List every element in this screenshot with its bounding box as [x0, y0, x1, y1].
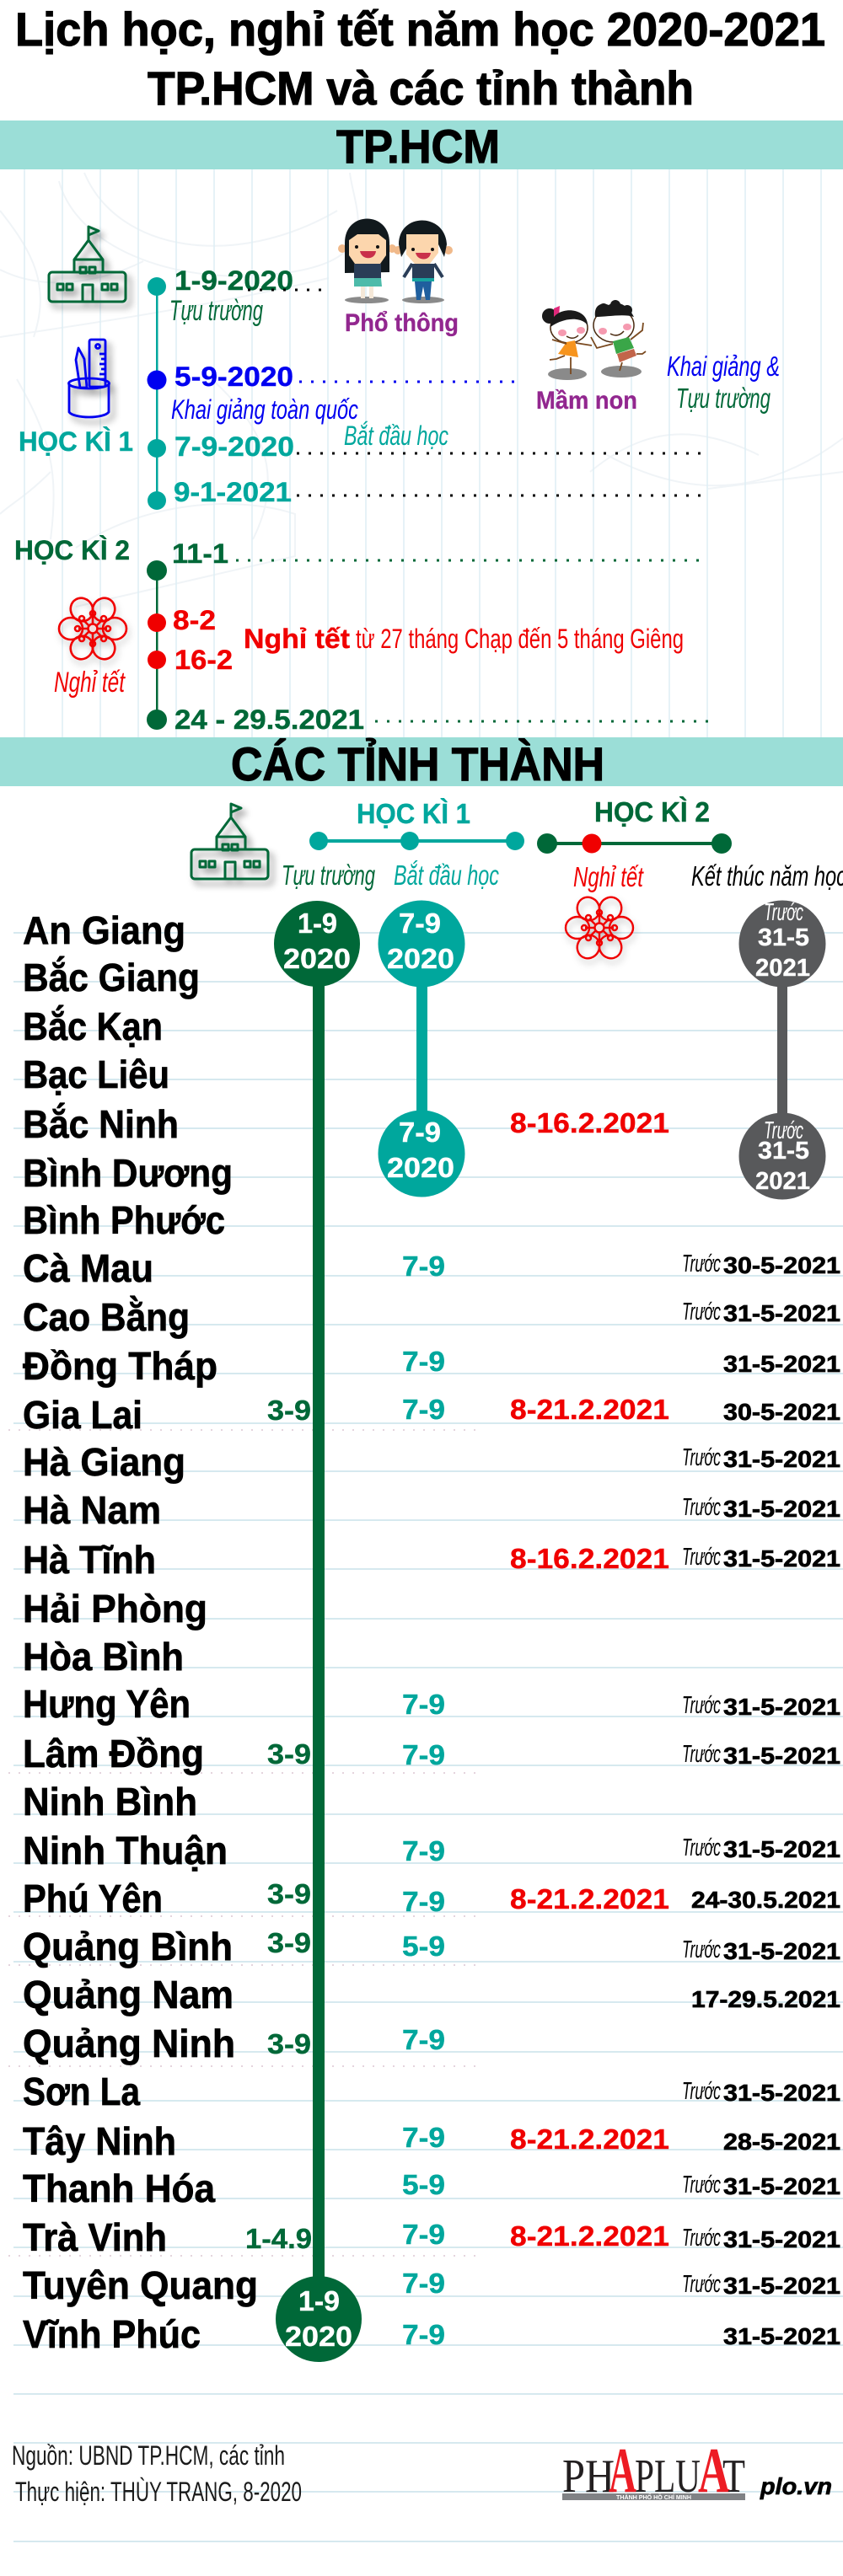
row: Cà Mau: Cà Mau — [23, 1246, 153, 1290]
row: Hưng Yên — [23, 1682, 840, 1726]
row: Lâm Đồng — [23, 1732, 840, 1775]
date: 7-9-2020 — [175, 420, 708, 462]
row: Gia Lai: 7-9 — [402, 1394, 445, 1425]
panel: các tỉnh thành heading band: CÁC TỈNH THÀNH — [231, 737, 604, 790]
row: Lâm Đồng: Lâm Đồng — [23, 1732, 204, 1775]
row: Đồng Tháp: Đồng Tháp — [23, 1344, 217, 1388]
row: Lâm Đồng: 3-9 — [267, 1738, 311, 1770]
row: Phú Yên: 24-30.5.2021 — [691, 1887, 840, 1913]
panel: TP.HCM timeline — [0, 169, 843, 737]
bracket: tựu trường 1-9-2020: 2020 — [283, 943, 351, 974]
row: Tuyên Quang: 31-5-2021 — [723, 2273, 840, 2299]
row: Hà Giang — [23, 1440, 840, 1484]
bracket: bắt đầu học 7-9-2020: 2020 — [387, 1152, 454, 1183]
bracket: bắt đầu học 7-9-2020 — [378, 900, 465, 1197]
logo: Pháp Luật: PH — [562, 2450, 615, 2503]
row: Hà Tĩnh — [23, 1538, 840, 1582]
row: Quảng Ninh: 7-9 — [402, 2024, 445, 2055]
row: Tuyên Quang — [23, 2263, 840, 2307]
panel: TP.HCM heading band — [0, 120, 843, 173]
row: Hưng Yên: 31-5-2021 — [723, 1694, 840, 1720]
row: Bắc Giang: Bắc Giang — [23, 956, 200, 999]
row: Gia Lai: 8-21.2.2021 — [510, 1394, 669, 1425]
row: Trà Vinh: Trà Vinh — [23, 2215, 167, 2259]
row: Hưng Yên: Trước — [682, 1692, 721, 1719]
icon: pencil cup — [69, 340, 110, 417]
timeline: semester 2 axis — [147, 560, 167, 730]
date: 1-9-2020 — [169, 265, 330, 327]
row: Thanh Hóa: Trước — [682, 2172, 721, 2198]
timeline: semester 1 axis — [147, 277, 167, 510]
bracket: tựu trường 1-9-2020: 1-9 — [298, 908, 337, 939]
row: Đồng Tháp — [23, 1344, 840, 1388]
footer: source and credit: Nguồn: UBND TP.HCM, các tỉnh — [12, 2440, 285, 2471]
row: Bình Dương: Bình Dương — [23, 1151, 233, 1195]
row: Hà Tĩnh: 31-5-2021 — [723, 1545, 840, 1572]
column label: tựu trường: Tựu trường — [282, 860, 375, 891]
row: Vĩnh Phúc: 31-5-2021 — [723, 2323, 840, 2349]
date: 1-9-2020: 1-9-2020 — [175, 265, 293, 296]
bracket: kết thúc trước 31-5-2021: 31-5 — [758, 1138, 809, 1165]
row: Cao Bằng: Cao Bằng — [23, 1295, 190, 1339]
bracket: tựu trường 1-9-2020 — [274, 901, 362, 2362]
bracket: bắt đầu học 7-9-2020: 2020 — [387, 943, 454, 974]
panel: các tỉnh thành heading band — [0, 737, 843, 790]
row: Cao Bằng — [23, 1295, 840, 1339]
row: Tuyên Quang: 7-9 — [402, 2268, 445, 2299]
row: Quảng Ninh: 3-9 — [267, 2028, 311, 2059]
row: Tây Ninh: Tây Ninh — [23, 2119, 176, 2163]
icon: preschool children — [542, 300, 646, 380]
row: Hà Tĩnh: Hà Tĩnh — [23, 1538, 156, 1582]
row: Gia Lai: Gia Lai — [23, 1393, 142, 1437]
legend: học kì 2: HỌC KÌ 2 — [594, 796, 710, 827]
label: khai giảng và tựu trường: Khai giảng & — [667, 351, 780, 382]
row: Ninh Thuận: Trước — [682, 1834, 721, 1861]
title: TP.HCM và các tỉnh thành — [148, 62, 694, 115]
row: Ninh Thuận: 31-5-2021 — [723, 1836, 840, 1862]
row: Cà Mau: 7-9 — [402, 1251, 445, 1282]
row: Hòa Bình: Hòa Bình — [23, 1635, 184, 1679]
row: Tây Ninh: 7-9 — [402, 2122, 445, 2153]
bracket: kết thúc trước 31-5-2021: Trước — [764, 899, 803, 926]
row: Cà Mau — [23, 1246, 840, 1290]
row: Quảng Ninh — [23, 2022, 445, 2065]
row: Hải Phòng: Hải Phòng — [23, 1587, 207, 1631]
icon: secondary students — [338, 219, 453, 303]
row: Tây Ninh: 28-5-2021 — [723, 2129, 840, 2155]
logo: Pháp Luật: PLU — [635, 2450, 701, 2503]
date: 16-2: 16-2 — [175, 645, 233, 675]
row: Hà Giang: 31-5-2021 — [723, 1446, 840, 1472]
row: Hà Tĩnh: 8-16.2.2021 — [510, 1543, 669, 1574]
column label: bắt đầu học: Bắt đầu học — [394, 860, 499, 891]
label: học kì 1: HỌC KÌ 1 — [19, 426, 133, 457]
icon: peach blossom small — [566, 893, 633, 962]
row: Hà Giang: Trước — [682, 1444, 721, 1471]
row: Phú Yên: 8-21.2.2021 — [510, 1883, 669, 1915]
panel: province table — [8, 796, 843, 2541]
date: 1-9-2020: Tựu trường — [169, 295, 263, 327]
row: Tây Ninh — [23, 2119, 840, 2163]
row: Ninh Thuận: 7-9 — [402, 1835, 445, 1866]
row: Quảng Bình: Quảng Bình — [23, 1925, 233, 1968]
row: Trà Vinh: 31-5-2021 — [723, 2226, 840, 2252]
date: 7-9-2020: Bắt đầu học — [344, 420, 448, 451]
row: Sơn La: Trước — [682, 2078, 721, 2105]
row: Hà Nam: Hà Nam — [23, 1488, 161, 1532]
bracket: kết thúc trước 31-5-2021: 2021 — [755, 955, 810, 982]
row: Phú Yên: 7-9 — [402, 1886, 445, 1917]
row: Bạc Liêu: Bạc Liêu — [23, 1052, 169, 1096]
label: mầm non: Mầm non — [536, 387, 637, 415]
title — [15, 3, 825, 115]
row: Quảng Bình: 5-9 — [402, 1931, 445, 1962]
row: Phú Yên: 3-9 — [267, 1878, 311, 1909]
logo: Pháp Luật: A — [609, 2435, 636, 2506]
row: Quảng Bình: 3-9 — [267, 1927, 311, 1958]
row: Cà Mau: Trước — [682, 1251, 721, 1277]
logo: Pháp Luật: A — [698, 2435, 730, 2506]
footer: source and credit — [12, 2440, 302, 2507]
row: Hà Nam: Trước — [682, 1494, 721, 1521]
row: Thanh Hóa — [23, 2166, 840, 2210]
row: Trà Vinh: 7-9 — [402, 2219, 445, 2250]
date: 7-9-2020: 7-9-2020 — [175, 431, 294, 462]
row: Quảng Bình — [23, 1925, 840, 1968]
label: nghỉ tết: Nghỉ tết — [54, 667, 126, 699]
date: 8-2: 8-2 — [173, 605, 216, 635]
bracket: bắt đầu học 7-9-2020: 7-9 — [399, 1117, 441, 1148]
row: Đồng Tháp: 31-5-2021 — [723, 1351, 840, 1377]
bracket: bắt đầu học 7-9-2020: 7-9 — [399, 908, 441, 939]
row: Gia Lai — [23, 1393, 840, 1437]
row: Trà Vinh: 8-21.2.2021 — [510, 2220, 669, 2252]
icon: school — [49, 227, 126, 302]
bracket: kết thúc trước 31-5-2021: 31-5 — [758, 924, 809, 951]
legend: học kì 1: HỌC KÌ 1 — [357, 798, 470, 829]
row: Trà Vinh: Trước — [682, 2225, 721, 2252]
row: Lâm Đồng: 31-5-2021 — [723, 1743, 840, 1769]
icon: school small — [191, 804, 268, 879]
note: nghỉ tết — [244, 624, 684, 654]
row: Trà Vinh: 1-4.9 — [245, 2223, 312, 2254]
bracket: tựu trường 1-9-2020: 2020 — [285, 2321, 352, 2352]
date: 9-1-2021: 9-1-2021 — [174, 477, 292, 507]
row: Phú Yên: Phú Yên — [23, 1877, 163, 1920]
row: Hà Tĩnh: Trước — [682, 1544, 721, 1571]
row: Bình Phước: Bình Phước — [23, 1198, 225, 1242]
row: Quảng Nam: 17-29.5.2021 — [691, 1986, 840, 2012]
note: nghỉ tết: Nghỉ tết — [244, 624, 350, 654]
row: Sơn La: Sơn La — [23, 2070, 140, 2113]
row: Quảng Nam — [23, 1973, 840, 2016]
bracket: kết thúc trước 31-5-2021 — [738, 899, 826, 1200]
row: Hà Giang: Hà Giang — [23, 1440, 185, 1484]
row: Vĩnh Phúc — [23, 2312, 840, 2356]
row: Tuyên Quang: Tuyên Quang — [23, 2263, 258, 2307]
row: Ninh Thuận: Ninh Thuận — [23, 1829, 228, 1872]
date: 11-1: 11-1 — [172, 538, 228, 569]
row: Đồng Tháp: 7-9 — [402, 1346, 445, 1377]
row: Cà Mau: 30-5-2021 — [723, 1252, 840, 1278]
row: Thanh Hóa: Thanh Hóa — [23, 2166, 215, 2210]
row: Bắc Kạn: Bắc Kạn — [23, 1004, 163, 1048]
row: Tuyên Quang: Trước — [682, 2271, 721, 2298]
logo: Pháp Luật — [562, 2435, 832, 2506]
row: Bắc Ninh: Bắc Ninh — [23, 1102, 179, 1146]
row: Quảng Nam: Quảng Nam — [23, 1973, 234, 2016]
row: Cao Bằng: Trước — [682, 1299, 721, 1325]
row: Tây Ninh: 8-21.2.2021 — [510, 2123, 669, 2155]
logo: Pháp Luật: T — [722, 2450, 745, 2503]
row: Gia Lai: 30-5-2021 — [723, 1399, 840, 1425]
icon: peach blossom — [59, 594, 126, 663]
row: Quảng Bình: Trước — [682, 1936, 721, 1963]
row: Bắc Ninh: 8-16.2.2021 — [510, 1107, 669, 1138]
row: Lâm Đồng: 7-9 — [402, 1739, 445, 1770]
row: Phú Yên — [23, 1877, 840, 1920]
date: 5-9-2020: 5-9-2020 — [175, 361, 293, 392]
column label: nghỉ tết: Nghỉ tết — [573, 861, 644, 892]
bracket: tựu trường 1-9-2020: 1-9 — [298, 2285, 340, 2316]
row: Lâm Đồng: Trước — [682, 1741, 721, 1768]
label: học kì 2: HỌC KÌ 2 — [14, 535, 130, 565]
label: khai giảng và tựu trường: Tựu trường — [676, 383, 771, 414]
date: 24 - 29.5.2021: 24 - 29.5.2021 — [175, 704, 364, 735]
row: Quảng Bình: 31-5-2021 — [723, 1938, 840, 1964]
row: Sơn La — [23, 2070, 840, 2113]
row: An Giang: An Giang — [23, 908, 185, 952]
footer: source and credit: Thực hiện: THÙY TRANG, 8-2020 — [15, 2477, 302, 2507]
row: Sơn La: 31-5-2021 — [723, 2080, 840, 2106]
row: Quảng Ninh: Quảng Ninh — [23, 2022, 235, 2065]
row: Vĩnh Phúc: 7-9 — [402, 2319, 445, 2350]
row: Hà Nam — [23, 1488, 840, 1532]
row: Bắc Ninh — [23, 1102, 669, 1146]
row: Cao Bằng: 31-5-2021 — [723, 1300, 840, 1326]
row: Ninh Bình: Ninh Bình — [23, 1780, 197, 1824]
legend: học kì 1 — [309, 798, 524, 850]
date: 5-9-2020: Khai giảng toàn quốc — [171, 394, 358, 425]
note: nghỉ tết: từ 27 tháng Chạp đến 5 tháng Giêng — [356, 624, 684, 654]
logo: Pháp Luật: THÀNH PHỐ HỒ CHÍ MINH — [616, 2493, 691, 2501]
title: Lịch học, nghỉ tết năm học 2020-2021 — [15, 3, 825, 56]
label: phổ thông: Phổ thông — [345, 309, 459, 337]
row: Vĩnh Phúc: Vĩnh Phúc — [23, 2312, 201, 2356]
panel: TP.HCM heading band: TP.HCM — [336, 120, 500, 173]
label: khai giảng và tựu trường — [667, 351, 780, 414]
row: Hưng Yên: Hưng Yên — [23, 1682, 191, 1726]
bracket: kết thúc trước 31-5-2021: 2021 — [755, 1168, 810, 1195]
row: Gia Lai: 3-9 — [267, 1395, 311, 1426]
bracket: kết thúc trước 31-5-2021: Trước — [764, 1117, 803, 1144]
row: Thanh Hóa: 31-5-2021 — [723, 2173, 840, 2199]
row: Trà Vinh — [23, 2215, 840, 2259]
row: Thanh Hóa: 5-9 — [402, 2169, 445, 2200]
row: Hưng Yên: 7-9 — [402, 1689, 445, 1720]
date: 5-9-2020 — [171, 361, 517, 425]
logo: Pháp Luật: plo.vn — [760, 2473, 832, 2499]
legend: học kì 2 — [537, 796, 732, 854]
row: Ninh Thuận — [23, 1829, 840, 1872]
row: Hà Nam: 31-5-2021 — [723, 1496, 840, 1522]
